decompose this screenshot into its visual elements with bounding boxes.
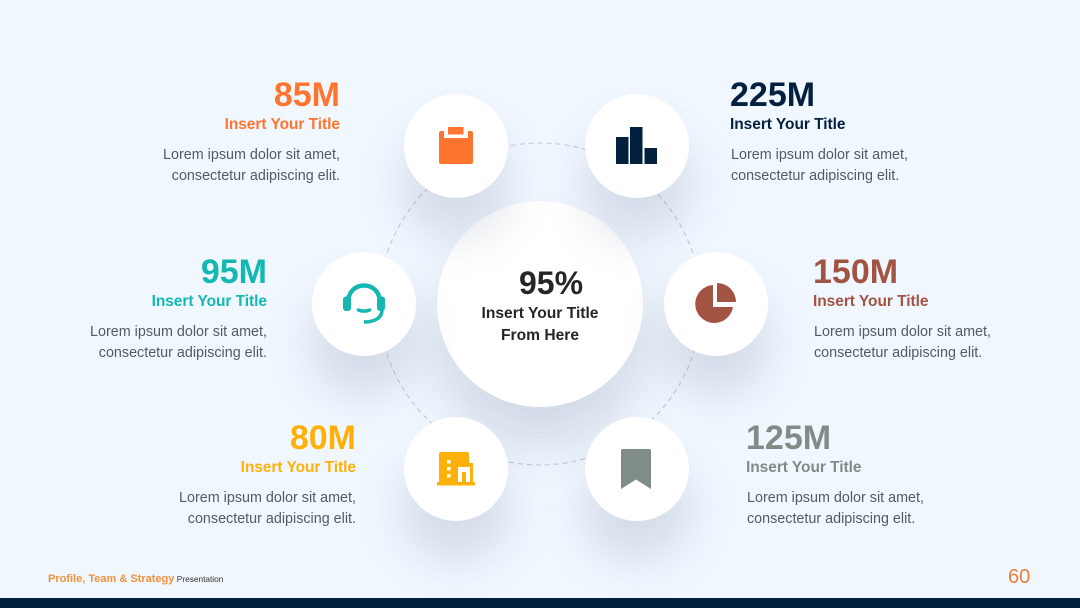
footer label: Profile, Team & Strategy Presentation [48, 573, 223, 585]
circle: pie chart [664, 252, 768, 356]
center value: 95% [519, 265, 583, 301]
text: Lorem ipsum dolor sit amet, [814, 324, 991, 340]
icon: building [437, 452, 475, 486]
footer bar [0, 598, 1080, 608]
text: Insert Your Title [225, 116, 340, 132]
icon: bookmark [621, 449, 651, 489]
circle: headset [312, 252, 416, 356]
text: Insert Your Title [746, 458, 861, 476]
text: Insert Your Title [152, 292, 267, 310]
circle: clipboard [404, 94, 508, 198]
center label [482, 305, 598, 344]
text: Insert Your Title [813, 292, 928, 310]
text: 95M [201, 253, 267, 291]
text: consectetur adipiscing elit. [188, 510, 356, 526]
text: Lorem ipsum dolor sit amet, [731, 146, 908, 162]
text: 225M [730, 76, 815, 114]
center label: Insert Your Title [482, 305, 598, 322]
text: Lorem ipsum dolor sit amet, [747, 490, 924, 506]
text: consectetur adipiscing elit. [747, 510, 915, 526]
text: 80M [290, 419, 356, 457]
circle: bar chart [585, 94, 689, 198]
circle: building [404, 417, 508, 521]
page number: 60 [1008, 566, 1030, 588]
icon: pie chart [695, 283, 736, 323]
text: 125M [746, 419, 831, 457]
icon: clipboard [439, 127, 473, 164]
circle: bookmark [585, 417, 689, 521]
icon: headset [343, 283, 385, 324]
text: Insert Your Title [241, 458, 356, 476]
text block: 150M [813, 253, 991, 360]
text: consectetur adipiscing elit. [814, 344, 982, 360]
text: Lorem ipsum dolor sit amet, [90, 324, 267, 340]
text block: 125M [746, 419, 924, 526]
text: Lorem ipsum dolor sit amet, [179, 490, 356, 506]
text: Lorem ipsum dolor sit amet, [163, 146, 340, 162]
text block: 225M [730, 76, 908, 184]
text: consectetur adipiscing elit. [99, 344, 267, 360]
icon: bar chart [616, 127, 657, 164]
text block: 95M [90, 253, 267, 360]
text block: 85M [163, 76, 340, 184]
text: Insert Your Title [730, 116, 845, 132]
text: 85M [274, 76, 340, 114]
text block: 80M [179, 419, 356, 526]
text: consectetur adipiscing elit. [731, 168, 899, 184]
center circle [437, 201, 643, 407]
text: consectetur adipiscing elit. [172, 168, 340, 184]
text: 150M [813, 253, 898, 291]
center label: From Here [501, 326, 579, 344]
